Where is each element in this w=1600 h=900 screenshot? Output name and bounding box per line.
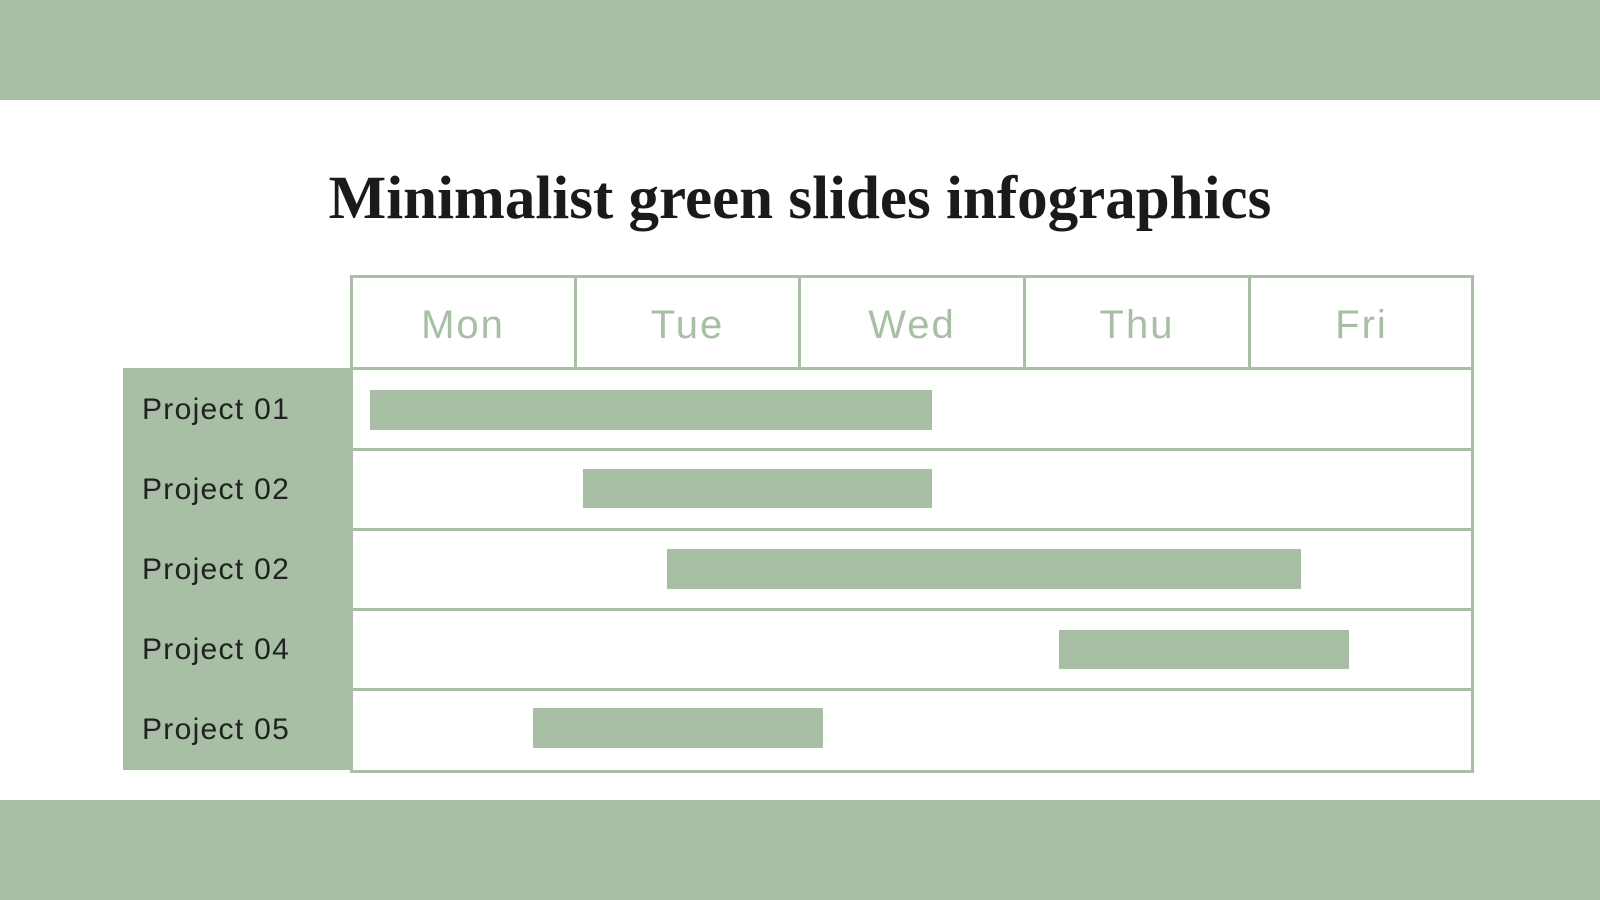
table frame: [350, 275, 1474, 773]
gantt chart: Project 04: [142, 633, 290, 666]
gantt chart: Project 05: [142, 713, 290, 746]
title: Minimalist green slides infographics: [329, 165, 1271, 232]
gantt chart: Thu: [1100, 303, 1174, 347]
bars: [370, 390, 932, 430]
gantt chart: Wed: [868, 303, 956, 347]
top band: [0, 0, 1600, 100]
day headers: Mon: [421, 303, 505, 347]
gantt chart: Tue: [651, 303, 724, 347]
gantt chart: Project 02: [142, 473, 290, 506]
project labels: Project 01: [142, 393, 290, 426]
label column: [123, 368, 352, 770]
bottom band: [0, 800, 1600, 900]
gantt chart: Fri: [1335, 303, 1388, 347]
gantt chart: Project 02: [142, 553, 290, 586]
